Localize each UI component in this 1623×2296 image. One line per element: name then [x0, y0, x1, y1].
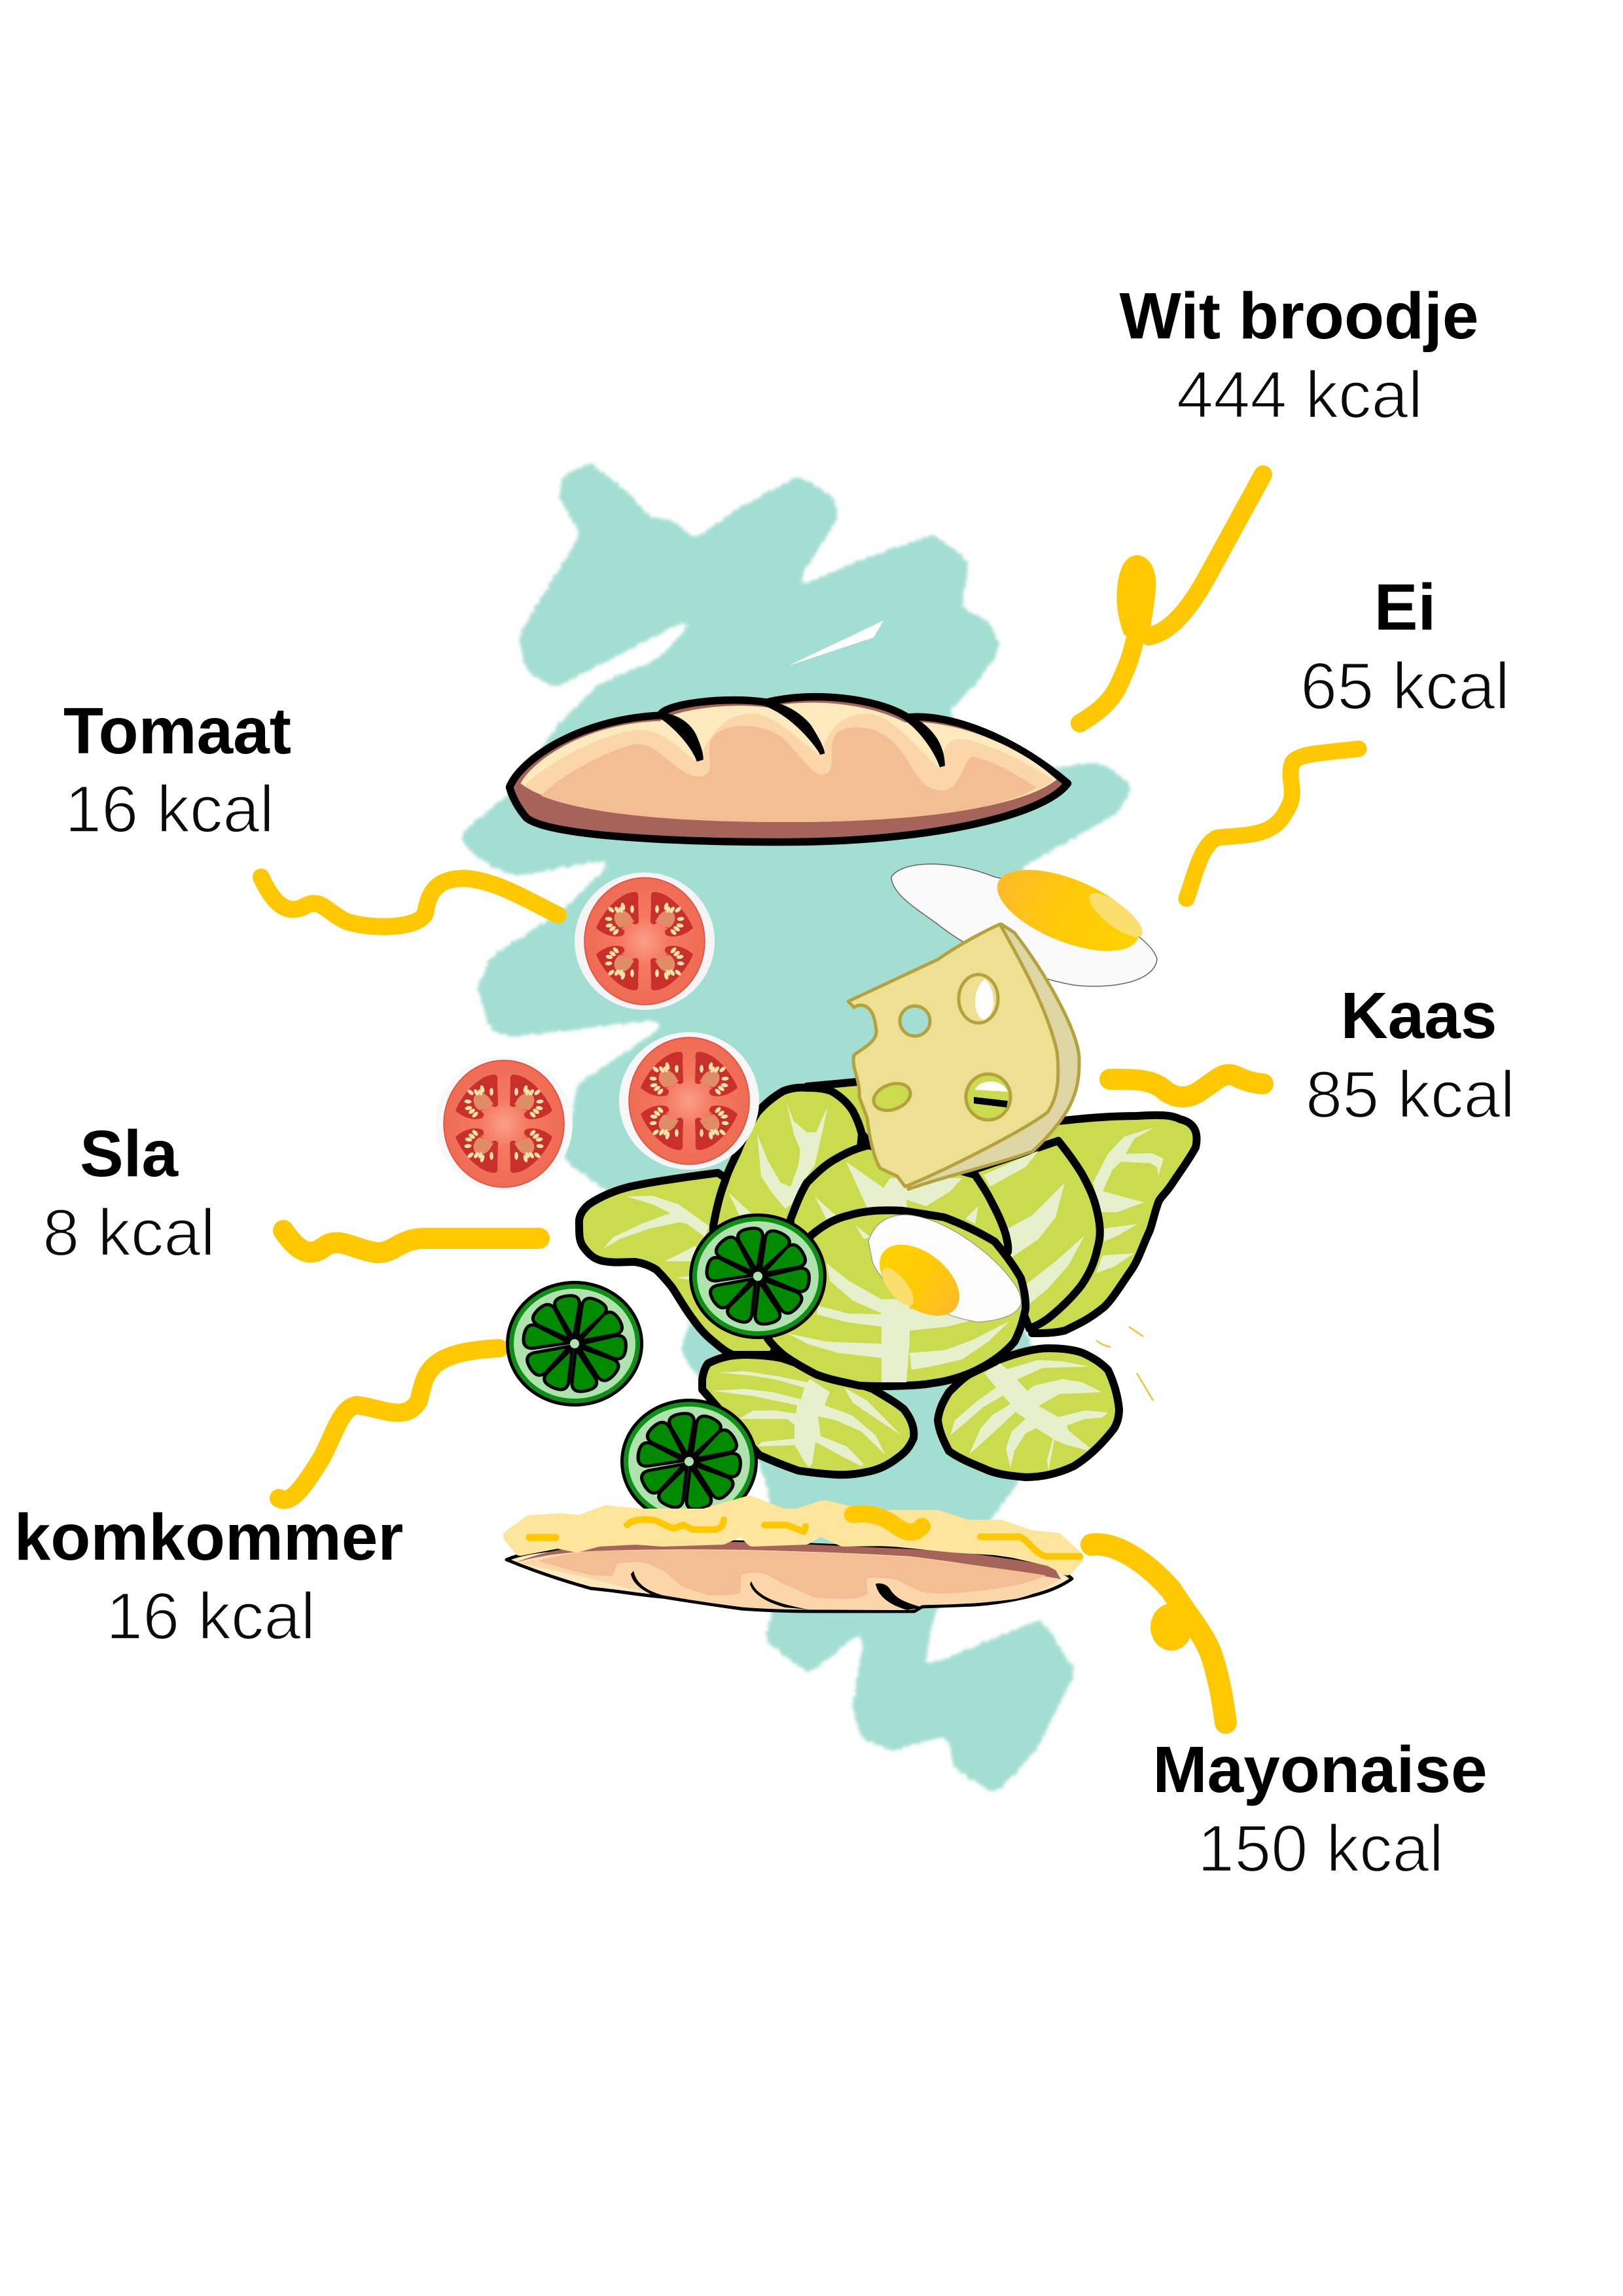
mayonnaise squiggles [529, 1514, 1080, 1556]
lettuce: left leaf [579, 1173, 825, 1355]
lettuce: front leaf [768, 1210, 1026, 1386]
label: mayonaise: 150 kcal [1198, 1812, 1444, 1886]
label: ei [1300, 571, 1510, 723]
callout: mayonaise line [1092, 1545, 1226, 1723]
callout: sla line [283, 1230, 539, 1253]
bottom bread bun [507, 1542, 1072, 1611]
small yellow flecks [1096, 1327, 1153, 1401]
callout: kaas line [1110, 1075, 1263, 1097]
label: mayonaise [1152, 1733, 1488, 1886]
label: kaas [1306, 979, 1515, 1132]
top bread bun [510, 697, 1067, 842]
callout: wit broodje line [1080, 475, 1263, 723]
tomato slice 1 [575, 872, 715, 1010]
label: komkommer: komkommer [14, 1501, 403, 1574]
egg: fried egg on lettuce [866, 1215, 1021, 1330]
callout: komkommer line [279, 1348, 499, 1499]
lettuce: middle leaf [791, 1145, 1008, 1283]
lettuce: right ribbon leaf [969, 1141, 1100, 1329]
label: sla: Sla [80, 1117, 179, 1191]
label: mayonaise: Mayonaise [1152, 1733, 1488, 1806]
callout: tomaat line [261, 877, 558, 927]
label: tomaat: Tomaat [63, 694, 291, 768]
lettuce: far right leaf [1021, 1115, 1197, 1333]
callout: ei line [1186, 749, 1359, 899]
cucumber slice 3 [620, 1399, 758, 1524]
teal brush background [461, 463, 1134, 1794]
cheese holes [870, 975, 1010, 1120]
label: kaas: 85 kcal [1306, 1058, 1515, 1132]
label: tomaat [63, 694, 291, 846]
cucumber slice 2 [506, 1281, 643, 1407]
label: tomaat: 16 kcal [65, 773, 274, 846]
label: komkommer: 16 kcal [106, 1580, 315, 1653]
tomato slice 3 [619, 1032, 759, 1170]
label: wit broodje: 444 kcal [1177, 359, 1423, 432]
mayonnaise layer [510, 1502, 1080, 1569]
lettuce [579, 1081, 1197, 1477]
label: sla [43, 1117, 215, 1270]
cheese wedge [848, 924, 1079, 1189]
label: ei: Ei [1374, 571, 1436, 644]
lettuce: bottom-right leaf [938, 1348, 1119, 1477]
label: kaas: Kaas [1340, 979, 1497, 1052]
label: komkommer [14, 1501, 403, 1653]
cucumber slice 1 [689, 1213, 827, 1339]
label: wit broodje [1119, 279, 1479, 432]
lettuce: bottom-left leaf [702, 1355, 914, 1475]
lettuce: top-left leaf [713, 1088, 862, 1244]
label: sla: 8 kcal [43, 1196, 215, 1270]
label: wit broodje: Wit broodje [1119, 279, 1479, 353]
tomato slice 2 [435, 1056, 573, 1191]
label: ei: 65 kcal [1300, 650, 1510, 723]
egg: top fried egg [891, 853, 1157, 986]
lettuce: back strip leaf [807, 1081, 877, 1152]
